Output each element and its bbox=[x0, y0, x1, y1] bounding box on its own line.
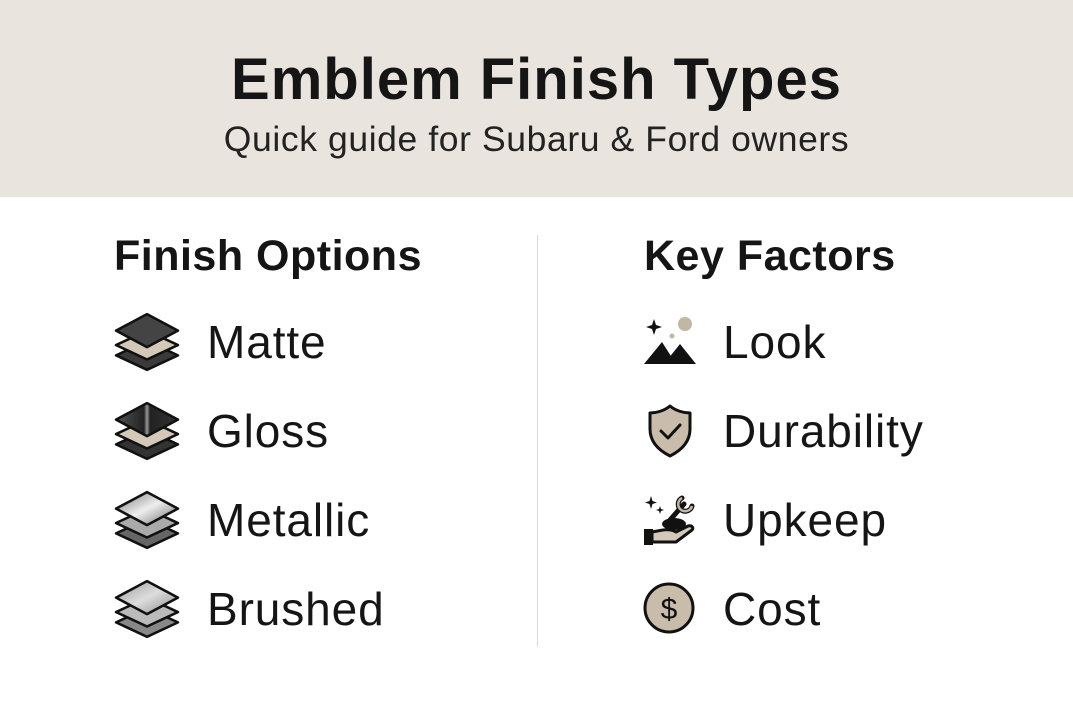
icon: durability bbox=[648, 404, 692, 458]
title: Emblem Finish Types bbox=[231, 47, 842, 112]
panel: key factors bbox=[644, 232, 924, 635]
text: metallic: Metallic bbox=[207, 494, 370, 546]
text: upkeep: Upkeep bbox=[723, 494, 887, 546]
text: look: Look bbox=[723, 316, 826, 368]
icon: cost bbox=[644, 582, 694, 634]
icon: cost: $ bbox=[661, 593, 678, 626]
text: matte: Matte bbox=[207, 316, 327, 368]
text: brushed: Brushed bbox=[207, 583, 385, 635]
subtitle: Quick guide for Subaru & Ford owners bbox=[224, 119, 849, 159]
heading: key factors: Key Factors bbox=[644, 232, 896, 280]
divider bbox=[537, 235, 538, 647]
panel: finish options bbox=[114, 232, 422, 638]
icon: look bbox=[644, 317, 696, 364]
heading: finish options: Finish Options bbox=[114, 232, 422, 280]
icon: matte bbox=[114, 312, 180, 372]
text: gloss: Gloss bbox=[207, 405, 329, 457]
icon: metallic bbox=[114, 490, 180, 550]
icon: upkeep bbox=[644, 496, 694, 545]
text: durability: Durability bbox=[723, 405, 924, 457]
icon: brushed bbox=[114, 580, 180, 638]
icon: gloss bbox=[114, 402, 180, 460]
text: cost: Cost bbox=[723, 583, 821, 635]
header band bbox=[0, 0, 1073, 197]
